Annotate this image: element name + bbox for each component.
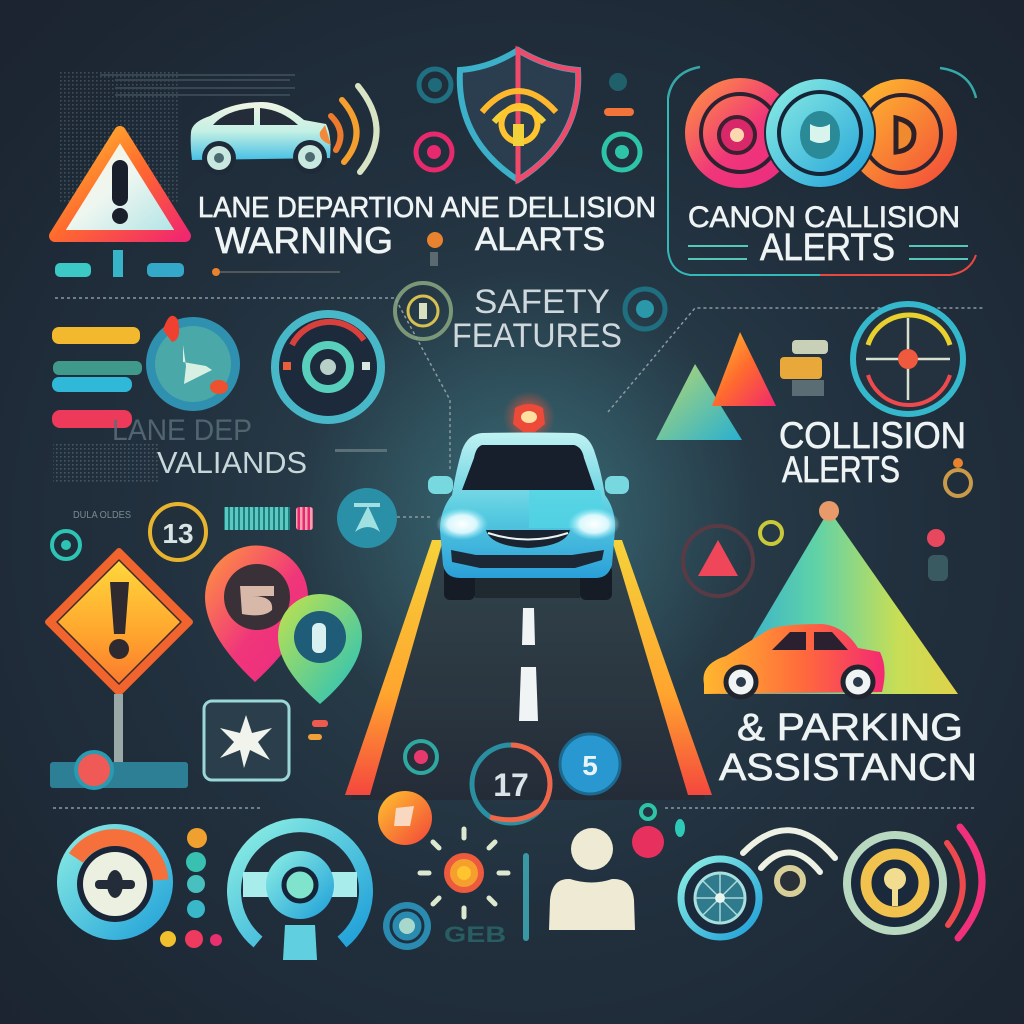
icon: gauge	[57, 824, 173, 940]
heading: CANON CALLISION	[688, 201, 960, 234]
dotted rules	[53, 807, 975, 809]
heading: ANE DELLISION	[441, 192, 656, 224]
icon: orange badge	[378, 791, 432, 845]
striped bar	[224, 507, 313, 530]
dotted texture	[58, 72, 295, 202]
icon: green map pin	[278, 594, 362, 704]
textured strip	[53, 443, 158, 482]
dashed divider	[55, 298, 450, 470]
icon: compass gauge	[853, 304, 963, 414]
icon: 13 ring: 13	[162, 518, 194, 549]
panel: collision alerts right	[608, 304, 985, 496]
grille	[486, 530, 570, 548]
car front view	[428, 391, 629, 600]
center title: SAFETY	[474, 283, 610, 321]
icon: teal badge	[337, 488, 397, 548]
connector	[397, 516, 432, 518]
undercarriage	[475, 578, 580, 598]
icon: orange circle	[847, 79, 957, 189]
icon: pink circle	[685, 78, 795, 188]
icon: sun	[420, 829, 508, 917]
panel: collision alerts middle: ALARTS	[475, 221, 605, 257]
heading: LANE DEP	[112, 414, 252, 447]
indicator bars	[55, 250, 184, 277]
panel: parking assistance: ASSISTANCN	[719, 747, 977, 789]
icon: ring	[383, 902, 431, 950]
panel: left lower signs	[48, 546, 362, 788]
icon: teal ring	[52, 531, 80, 559]
panel: canon collision alerts	[668, 67, 976, 275]
headlights	[436, 508, 620, 540]
road	[345, 540, 712, 800]
left lane line	[345, 540, 443, 795]
bottom centre icons	[378, 734, 685, 950]
frame	[668, 67, 976, 275]
hood right panel	[529, 490, 607, 528]
center title	[395, 283, 665, 355]
dots	[160, 828, 222, 948]
small icons	[760, 522, 948, 581]
icon: teal dot	[625, 289, 665, 329]
icon: red triangle	[712, 332, 776, 406]
panel: collision alerts middle	[416, 50, 656, 266]
panel: canon collision alerts: ALERTS	[760, 227, 895, 269]
icon: dial	[395, 283, 451, 339]
right lane line	[612, 540, 712, 795]
icon: blue circle	[765, 78, 875, 188]
mirrors	[428, 476, 629, 494]
icon: arcs	[743, 830, 835, 894]
icon: sensor pyramid	[720, 501, 958, 694]
icon: device	[780, 340, 828, 396]
icon: steering wheel	[234, 825, 366, 960]
panel: bottom left	[57, 824, 366, 960]
lower grille	[451, 550, 604, 568]
icon: gauge	[275, 314, 381, 420]
heading: COLLISION	[779, 415, 966, 456]
icon: flower tile	[204, 701, 289, 780]
ghost label: GEB	[444, 922, 506, 947]
icon: blue badge: 5	[582, 750, 598, 781]
dashed divider	[608, 308, 985, 412]
central glow	[295, 270, 755, 750]
panel: row of small icons	[52, 488, 432, 560]
body	[440, 432, 615, 578]
icon: blue badge	[560, 734, 620, 794]
heading: & PARKING	[737, 707, 963, 749]
icon: signal waves	[331, 86, 377, 172]
tyres	[444, 565, 612, 600]
warning beacon	[503, 391, 555, 443]
icon: teal triangle	[656, 364, 742, 440]
panel: parking assistance	[683, 501, 977, 789]
icon: pink map pin	[205, 546, 308, 682]
small label: DULA OLDES	[73, 510, 131, 521]
icon: blue round	[146, 316, 240, 411]
icon: small ring	[945, 458, 971, 496]
heading: LANE DEPARTION	[198, 192, 434, 224]
center title: FEATURES	[452, 317, 622, 355]
icon: red ring	[405, 741, 437, 773]
icon: diamond warning sign	[48, 551, 190, 693]
icon: target	[847, 835, 943, 931]
icon: car side view	[191, 102, 331, 175]
small icons	[523, 805, 685, 941]
small icon pin	[427, 232, 443, 266]
icon: wheel	[681, 859, 759, 937]
panel: bottom right	[681, 827, 982, 938]
colour bars	[52, 327, 142, 428]
icon: pink waves	[947, 827, 982, 938]
small marker	[308, 720, 328, 740]
sign pole and base	[50, 694, 188, 788]
small bar right	[335, 449, 387, 452]
centre dashes	[519, 608, 538, 721]
panel: left middle	[52, 298, 450, 482]
icon: red triangle in ring	[683, 526, 753, 596]
panel: left middle: VALIANDS	[157, 445, 307, 480]
panel: lane departure warning	[55, 72, 434, 277]
panel: collision alerts right: ALERTS	[782, 449, 900, 490]
icon: dial 17: 17	[493, 767, 529, 803]
icon: shield	[460, 50, 578, 180]
icon: red car	[703, 624, 885, 697]
panel: lane departure warning: WARNING	[215, 220, 393, 261]
bottom bar	[212, 268, 340, 276]
small icons	[416, 69, 640, 170]
icon: person	[549, 828, 635, 930]
windshield	[462, 445, 595, 490]
icon: warning triangle	[55, 132, 185, 236]
icon: dial 17	[472, 745, 550, 823]
icon: 13 ring	[150, 504, 206, 560]
